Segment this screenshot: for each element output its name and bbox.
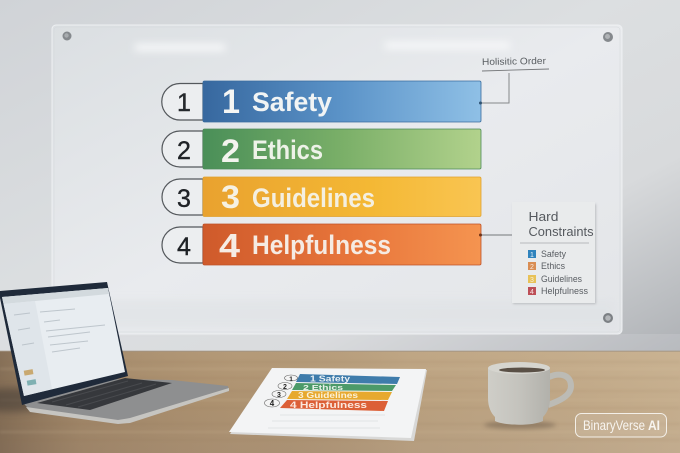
panel: hard constraints card [512,202,596,304]
paper chart rows: 1 [289,376,293,383]
laptop screen [0,282,128,405]
icon: bottom right mount [603,313,613,323]
desk surface [0,350,680,453]
row 2 Ethics: 2 [177,137,191,165]
row 4 Helpfulness: 4 [219,227,241,264]
chart: priority order bars [162,81,481,265]
document on desk [229,368,427,441]
paper chart rows: 2 Ethics [303,383,343,392]
paper chart rows [264,374,400,411]
row 3 Guidelines [162,177,481,216]
paper chart rows: 1 Safety [310,374,351,384]
row 1 Safety: Safety [252,87,332,117]
laptop [0,282,229,424]
legend: constraints list: Helpfulness [541,286,588,296]
legend: constraints list: 4 [530,289,534,296]
panel: hard constraints card: Constraints [528,224,594,239]
paper chart rows: 3 Guidelines [298,391,359,400]
coffee mug [484,362,571,429]
arrow: helpfulness connector to hard constraints [479,234,514,236]
row 3 Guidelines: 3 [221,179,240,215]
logo: BinaryVerse AI badge: BinaryVerse [583,417,645,433]
callout: holistic order label [479,56,549,104]
legend: constraints list: 3 [530,277,534,284]
wall background [0,0,680,352]
paper chart rows: 3 [277,392,281,399]
legend: constraints list: Ethics [541,261,565,271]
legend: constraints list: 2 [530,264,534,271]
keyboard [37,378,172,410]
row 2 Ethics [162,129,481,169]
mug handle [548,375,571,405]
icon: top left mount [62,32,72,40]
row 1 Safety [162,81,481,122]
row 2 Ethics: Ethics [252,135,323,165]
callout: holistic order label: Holisitic Order [482,56,546,68]
row 2 Ethics: 2 [221,133,240,169]
legend: constraints list [528,249,588,296]
logo: BinaryVerse AI badge: AI [648,417,660,433]
row 4 Helpfulness: 4 [177,233,191,261]
row 1 Safety: 1 [222,83,240,121]
row 1 Safety: 1 [177,89,191,117]
icon: top right mount [603,32,613,42]
paper chart rows: 4 [270,399,275,408]
row 3 Guidelines: 3 [177,185,191,213]
row 4 Helpfulness: Helpfulness [252,230,391,260]
paper chart rows: 2 [283,384,287,391]
row 4 Helpfulness [162,224,481,265]
legend: constraints list: Guidelines [541,274,582,284]
row 3 Guidelines: Guidelines [252,183,375,213]
laptop base [24,379,229,422]
logo: BinaryVerse AI badge [576,414,666,437]
paper chart rows: 4 Helpfulness [290,400,367,411]
legend: constraints list: 1 [530,252,534,259]
panel: glass board [52,25,622,334]
heading: hard constraints: Hard [528,209,558,224]
legend: constraints list: Safety [541,249,566,259]
